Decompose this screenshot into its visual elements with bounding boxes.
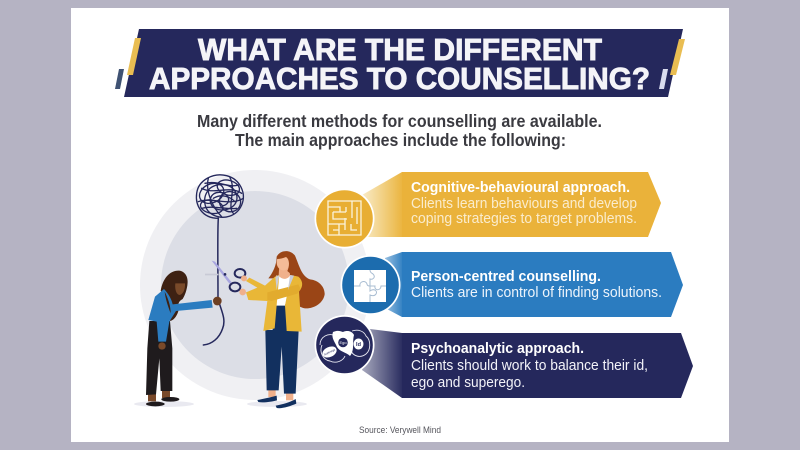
subtitle [197, 111, 602, 150]
title text: APPROACHES TO COUNSELLING? [149, 62, 650, 96]
text: person-centred: Clients are in control of finding solutions. [411, 285, 662, 301]
source note: Source: Verywell Mind [359, 425, 441, 435]
panel: white page [71, 8, 729, 442]
legs and shoes [257, 330, 299, 408]
text: cognitive-behavioural: Cognitive-behavioural approach. [411, 180, 630, 196]
icon: maze [314, 188, 374, 248]
title banner [115, 29, 685, 97]
icon: brain id ego superego: Id [356, 342, 361, 348]
text: psychoanalytic: Psychoanalytic approach. [411, 341, 584, 357]
icon: brain id ego superego [314, 315, 374, 375]
panel: cognitive-behavioural approach [362, 172, 661, 237]
icon: puzzle [340, 255, 400, 315]
subtitle: The main approaches include the following: [235, 130, 566, 150]
text: cognitive-behavioural [411, 180, 637, 227]
scissors [205, 261, 245, 291]
background circles [140, 170, 370, 400]
panel: person-centred counselling [385, 252, 683, 317]
text: person-centred [411, 269, 662, 301]
woman on right [239, 251, 325, 408]
subtitle: Many different methods for counselling are available. [197, 111, 602, 131]
title text: WHAT ARE THE DIFFERENT [198, 33, 602, 67]
text: psychoanalytic: ego and superego. [411, 375, 525, 391]
text: cognitive-behavioural: Clients learn behaviours and develop [411, 196, 637, 212]
icon: brain id ego superego: Superego [323, 347, 336, 356]
woman on left [146, 271, 222, 406]
text: psychoanalytic: Clients should work to balance their id, [411, 358, 648, 374]
icon: brain id ego superego: Ego [339, 340, 347, 345]
panel: psychoanalytic approach [362, 329, 693, 398]
text: cognitive-behavioural: coping strategies to target problems. [411, 211, 637, 227]
title text [149, 33, 650, 96]
illustration: two women cutting a tangled string [134, 175, 325, 408]
tangled scribble and string [196, 175, 243, 345]
text: person-centred: Person-centred counselling. [411, 269, 601, 285]
torso, arms, hair and face [239, 251, 325, 333]
text: psychoanalytic [411, 341, 648, 391]
